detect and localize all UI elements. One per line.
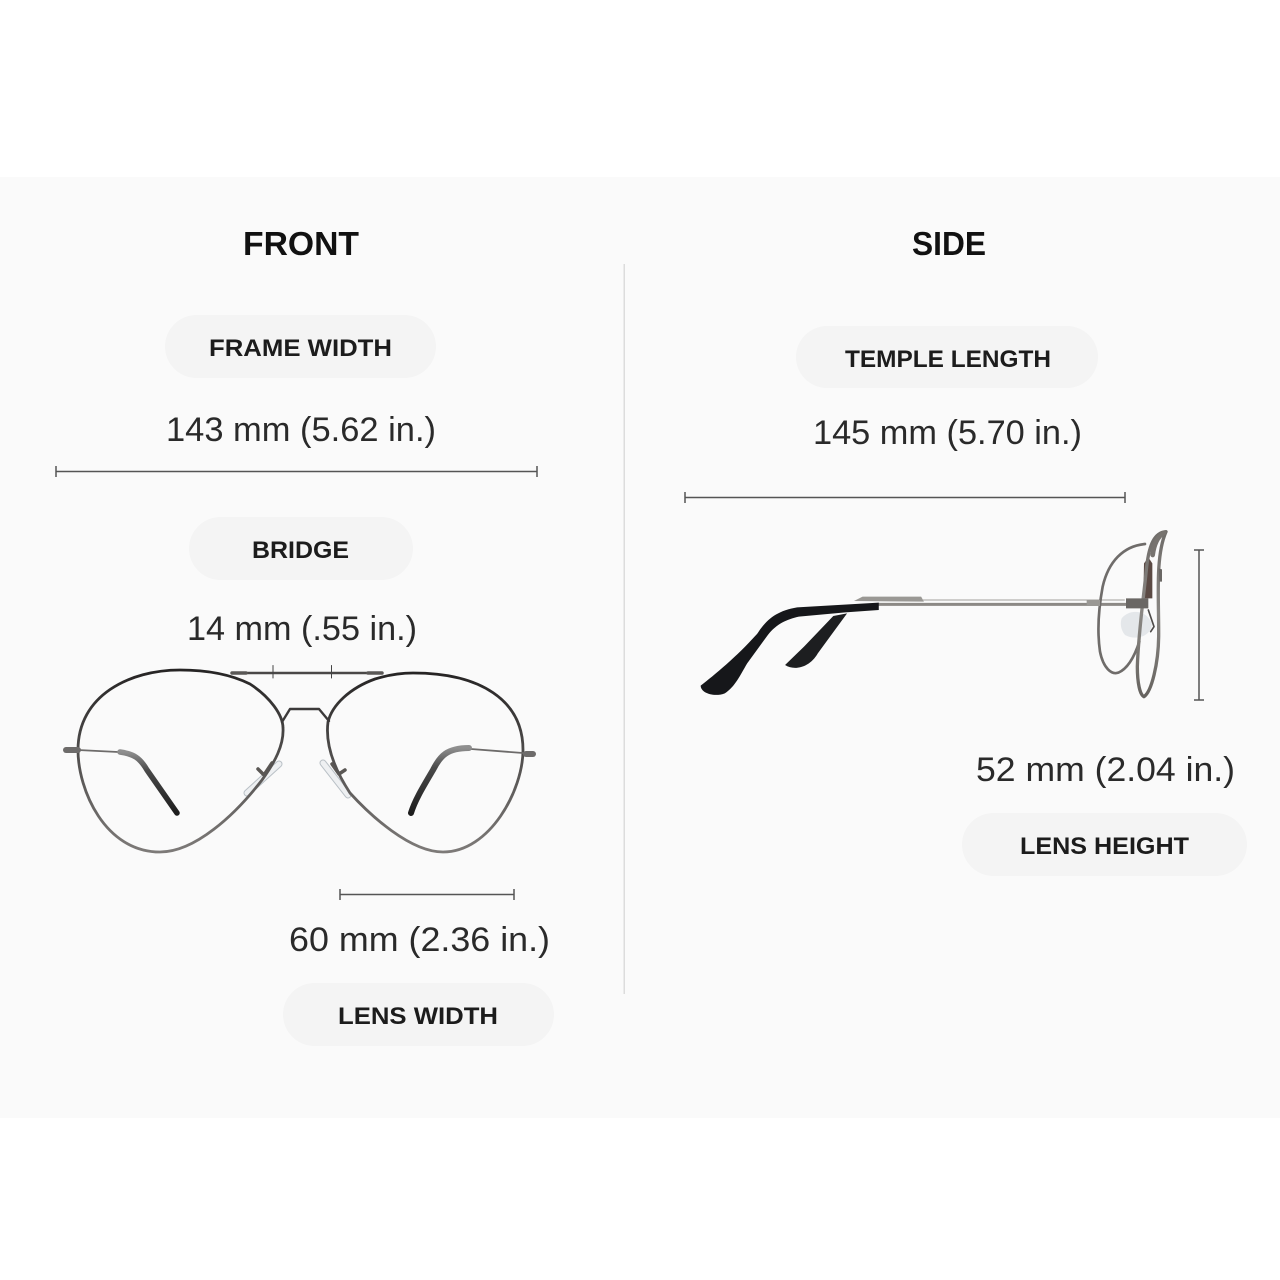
value: bridge: 14 mm (.55 in.): [187, 610, 417, 648]
pill: bridge: [189, 517, 413, 580]
background panel: [0, 177, 1280, 1118]
left lens rim: [78, 670, 283, 852]
pill: lens height: [962, 813, 1247, 876]
value: frame width: 143 mm (5.62 in.): [166, 411, 436, 449]
frame from the side: [1087, 532, 1166, 697]
temple arm: [878, 600, 1126, 609]
pill: frame width: FRAME WIDTH: [209, 335, 392, 362]
front lens rim: [1137, 532, 1166, 697]
panel: front view: [56, 225, 554, 1046]
icon: glasses front view: [66, 666, 533, 852]
value: temple length: 145 mm (5.70 in.): [813, 414, 1082, 452]
top bar with ticks: [232, 672, 382, 674]
upper rim thickening: [1153, 533, 1164, 555]
nose pads: [247, 763, 348, 795]
value: lens height: 52 mm (2.04 in.): [976, 751, 1235, 789]
measure line: temple length: [685, 492, 1125, 503]
measure line: lens width: [340, 889, 514, 900]
pill: lens width: [283, 983, 554, 1046]
pad arm: [1148, 610, 1154, 632]
right lens rim: [327, 673, 523, 852]
icon: glasses side view: [701, 532, 1166, 697]
nose pad: [1121, 612, 1152, 638]
heading: side: SIDE: [912, 225, 986, 262]
far temple tip: [785, 613, 847, 668]
temple tip: [701, 603, 879, 695]
lens hardware: [1159, 568, 1162, 582]
centre divider: [624, 264, 625, 994]
hinge: [1126, 598, 1148, 608]
pill: temple length: [796, 326, 1098, 388]
pill: temple length: TEMPLE LENGTH: [845, 346, 1051, 373]
measure line: frame width: [56, 466, 537, 477]
temple plate: [854, 597, 924, 602]
pill: frame width: [165, 315, 436, 378]
measure line: lens height: [1194, 550, 1204, 700]
heading: front: FRONT: [243, 225, 359, 262]
left temple: [66, 750, 177, 813]
nose bridge: [282, 709, 329, 722]
temple and tips: [701, 597, 1126, 695]
value: lens width: 60 mm (2.36 in.): [289, 921, 550, 959]
pill: lens width: LENS WIDTH: [338, 1003, 498, 1030]
pill: bridge: BRIDGE: [252, 537, 349, 564]
panel: side view: [685, 225, 1247, 876]
rear lens rim: [1099, 544, 1145, 673]
inner shading: [1143, 557, 1152, 598]
pill: lens height: LENS HEIGHT: [1020, 833, 1189, 860]
right temple: [411, 748, 533, 813]
